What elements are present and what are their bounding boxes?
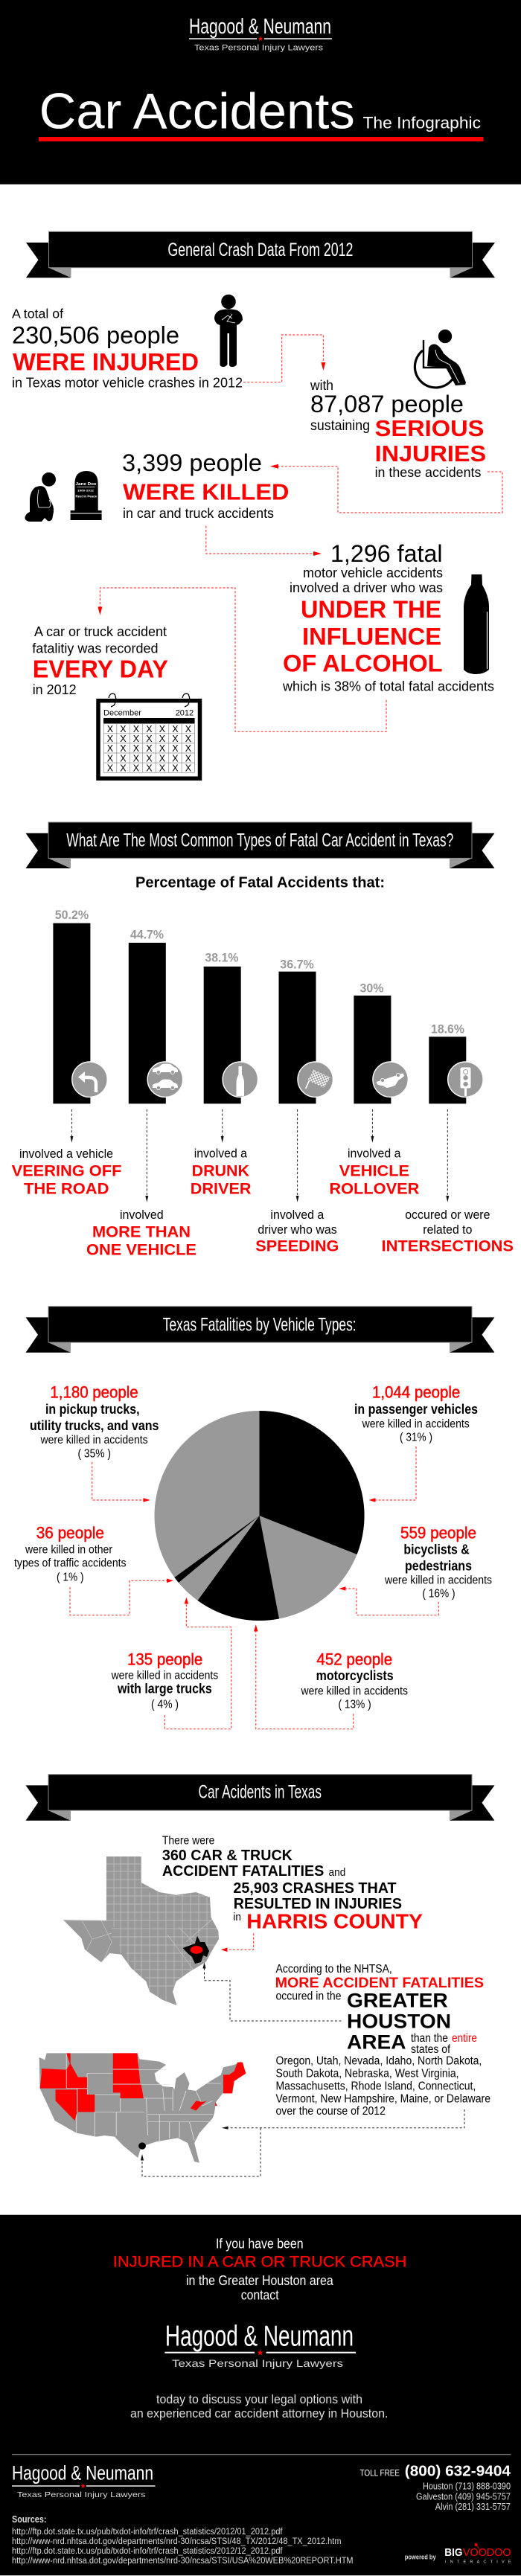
text block: Harris County: 360 CAR & TRUCK [162, 1848, 293, 1864]
arrow: injured to serious injuries [243, 335, 325, 382]
text block: Greater Houston area: GREATER [347, 1990, 448, 2012]
logo: small: Texas Personal Injury Lawyers [17, 2490, 146, 2499]
text block: every day: A car or truck accident [34, 624, 167, 639]
label: more than one vehicle: involved [120, 1208, 164, 1222]
arrow: passenger vehicles to pie [369, 1446, 416, 1502]
label: large trucks: with large trucks [117, 1682, 212, 1696]
label: large trucks: ( 4% ) [151, 1698, 179, 1711]
Houston marker [138, 2142, 146, 2150]
label: pickup trucks: utility trucks, and vans [30, 1418, 159, 1433]
phone numbers: (800) 632-9404 [405, 2463, 511, 2479]
section banner: Texas fatalities by vehicle types [25, 1307, 494, 1353]
sources [12, 2514, 354, 2566]
bar: veering off the road: 50.2% [55, 909, 89, 922]
label: vehicle rollover: VEHICLE [339, 1162, 409, 1180]
label: other traffic accidents: ( 1% ) [57, 1571, 83, 1583]
icon: calendar: XXXXXXX [107, 743, 192, 754]
call to action [113, 2237, 406, 2302]
arrow: Harris County to map [221, 1933, 254, 1952]
text block: under the influence of alcohol: UNDER THE [301, 596, 441, 623]
label: bicyclists and pedestrians: pedestrians [405, 1558, 472, 1573]
label: intersections: INTERSECTIONS [381, 1237, 514, 1255]
text block: 230,506 people were injured: 230,506 people [12, 322, 179, 349]
icon: calendar: 2012 [176, 708, 194, 717]
section banner: Car Acidents in Texas: Car Acidents in Texas [198, 1782, 322, 1803]
label: more than one vehicle [86, 1208, 196, 1259]
title underline [39, 137, 484, 141]
section banner: General Crash Data From 2012 [26, 231, 495, 278]
text block: Greater Houston area: Vermont, New Hampshire, Maine, or Delaware [275, 2092, 490, 2105]
text block: 87,087 serious injuries [310, 378, 486, 480]
label: pickup trucks [30, 1383, 159, 1460]
map: Texas counties [63, 1856, 219, 2005]
icon: bottle [223, 1062, 258, 1097]
sources: http://ftp.dot.state.tx.us/pub/txdot-info/trf/crash_statistics/2012/12_2012.pdf [12, 2547, 283, 2556]
logo: Hagood & Neumann [189, 15, 332, 52]
label: veering off the road: involved a vehicle [19, 1147, 113, 1161]
text block: 87,087 serious injuries: INJURIES [375, 440, 486, 467]
label: other traffic accidents: types of traffic accidents [14, 1557, 127, 1569]
text block: 87,087 serious injuries: in these accidents [375, 465, 481, 480]
label: veering off the road [12, 1147, 121, 1198]
label: large trucks [111, 1650, 219, 1711]
label: motorcyclists [301, 1650, 408, 1711]
arrows: bar chart to labels [70, 1109, 449, 1202]
call to action: If you have been [216, 2237, 304, 2252]
bar: more than one vehicle [129, 928, 166, 1103]
label: pickup trucks: in pickup trucks, [45, 1402, 140, 1417]
map: United States [39, 2053, 246, 2163]
label: speeding [255, 1208, 339, 1255]
label: bicyclists and pedestrians [384, 1524, 492, 1601]
text block: Harris County: HARRIS COUNTY [246, 1909, 423, 1932]
icon: calendar: XXXXXXX [107, 734, 192, 744]
text block: 3,399 people were killed [122, 449, 289, 521]
credit: Big Voodoo Interactive: VOODOO [463, 2546, 511, 2559]
label: passenger vehicles: ( 31% ) [400, 1432, 432, 1444]
label: intersections: related to [423, 1223, 472, 1237]
label: veering off the road: VEERING OFF [12, 1162, 121, 1180]
label: motorcyclists: 452 people [316, 1650, 392, 1669]
phone numbers [360, 2463, 511, 2512]
label: passenger vehicles: in passenger vehicles [354, 1402, 478, 1417]
logo: small: Hagood & Neumann [12, 2461, 153, 2484]
section banner: Texas fatalities by vehicle types: Texas Fatalities by Vehicle Types: [163, 1314, 357, 1335]
text block: 230,506 people were injured: A total of [12, 306, 63, 321]
call to action: INJURED IN A CAR OR TRUCK CRASH [113, 2254, 406, 2271]
label: large trucks: were killed in accidents [111, 1670, 219, 1682]
bar: more than one vehicle: 44.7% [130, 928, 164, 941]
bar chart: fatal accident types [53, 909, 483, 1103]
icon: checkered flag [298, 1062, 333, 1097]
credit: Big Voodoo Interactive: INTERACTIVE [445, 2560, 511, 2564]
text block: under the influence of alcohol: INFLUENCE [302, 624, 441, 650]
red states [40, 2053, 246, 2121]
text block: under the influence of alcohol: which is 38% of total fatal accidents [282, 679, 494, 694]
label: veering off the road: THE ROAD [24, 1180, 109, 1198]
bar: intersections [429, 1022, 466, 1103]
text block: Greater Houston area: South Dakota, Nebraska, West Virginia, [275, 2067, 458, 2080]
text block: Greater Houston area: states of [411, 2043, 451, 2056]
bar: drunk driver [204, 952, 241, 1103]
icon: calendar [98, 693, 199, 778]
bar: vehicle rollover [354, 981, 391, 1103]
arrow: pickup trucks to pie [92, 1462, 150, 1502]
text block: Harris County: and [329, 1866, 345, 1879]
label: bicyclists and pedestrians: 559 people [400, 1524, 476, 1542]
text block: 87,087 serious injuries: with [310, 378, 333, 393]
section banner: Car Acidents in Texas [25, 1775, 494, 1821]
bar: veering off the road [53, 909, 90, 1103]
text block: every day: in 2012 [33, 682, 77, 697]
label: drunk driver: DRUNK [192, 1162, 249, 1180]
text block: Harris County [162, 1834, 423, 1932]
credit: Big Voodoo Interactive [405, 2543, 511, 2564]
arrow: killed to alcohol [206, 526, 322, 556]
sources: http://ftp.dot.state.tx.us/pub/txdot-info/trf/crash_statistics/2012/01_2012.pdf [12, 2528, 283, 2537]
text block: Harris County: There were [162, 1834, 214, 1847]
text block: Harris County: 25,903 CRASHES THAT [233, 1880, 397, 1897]
text block: Greater Houston area: According to the NHTSA, [275, 1963, 392, 1976]
label: motorcyclists: were killed in accidents [301, 1685, 408, 1697]
icon: kneeling person [25, 472, 56, 522]
Harris County [191, 1946, 202, 1954]
text block: every day: fatalitiy was recorded [32, 641, 159, 656]
label: passenger vehicles: were killed in accidents [362, 1417, 470, 1430]
label: other traffic accidents: 36 people [36, 1524, 104, 1542]
bar: speeding [278, 958, 316, 1103]
panel: footer [0, 2215, 521, 2576]
label: bicyclists and pedestrians: were killed in accidents [384, 1574, 492, 1586]
arrow: other accidents to pie [70, 1579, 173, 1615]
text block: Greater Houston area: entire [452, 2032, 477, 2045]
text block: under the influence of alcohol [282, 540, 494, 694]
closing text: today to discuss your legal options with [156, 2392, 362, 2406]
bar: drunk driver: 38.1% [205, 952, 239, 965]
text block: Greater Houston area: AREA [347, 2031, 406, 2054]
chart heading: Percentage of Fatal Accidents that: [135, 875, 385, 891]
arrow: Greater Houston to Texas map [202, 1962, 341, 2021]
sources: http://www-nrd.nhtsa.dot.gov/departments/nrd-30/ncsa/STSI/USA%20WEB%20REPORT.HTM [12, 2557, 354, 2566]
text block: 87,087 serious injuries: sustaining [310, 418, 370, 434]
text block: Greater Houston area: MORE ACCIDENT FATALITIES [275, 1976, 484, 1991]
sources: http://www-nrd.nhtsa.dot.gov/departments/nrd-30/ncsa/STSI/48_TX/2012/48_TX_2012.htm [12, 2537, 341, 2546]
text block: Greater Houston area: Oregon, Utah, Nevada, Idaho, North Dakota, [275, 2054, 482, 2067]
arrow: alcohol to every day [98, 588, 386, 731]
label: other traffic accidents: were killed in other [25, 1543, 112, 1556]
credit: Big Voodoo Interactive: BIG [444, 2546, 462, 2559]
label: bicyclists and pedestrians: ( 16% ) [422, 1588, 456, 1601]
text block: Harris County: in [233, 1911, 241, 1923]
label: vehicle rollover: involved a [348, 1146, 401, 1160]
logo: Hagood & Neumann: Hagood & Neumann [189, 15, 331, 39]
logo: small [12, 2461, 155, 2499]
icon: calendar: December [103, 708, 141, 717]
text block: 87,087 serious injuries: 87,087 people [310, 391, 464, 417]
icon: tombstone: Rest in Peace [76, 494, 97, 499]
logo: Hagood & Neumann: Texas Personal Injury Lawyers [194, 43, 324, 52]
text block: 3,399 people were killed: WERE KILLED [123, 479, 289, 505]
logo: large: Hagood & Neumann [165, 2321, 354, 2353]
arrow: serious injuries to killed [270, 464, 502, 513]
icon: tombstone: Jane Doe [76, 482, 97, 487]
text block: Greater Houston area: occured in the [275, 1990, 341, 2002]
closing text [130, 2392, 388, 2420]
label: speeding: involved a [270, 1208, 325, 1222]
text block: Greater Houston area: Massachusetts, Rhode Island, Connecticut, [275, 2080, 476, 2092]
label: pickup trucks: ( 35% ) [77, 1447, 111, 1460]
label: other traffic accidents [14, 1524, 127, 1583]
Greater Houston counties [183, 1936, 209, 1964]
section banner: General Crash Data From 2012: General Crash Data From 2012 [167, 240, 353, 260]
label: speeding: SPEEDING [255, 1237, 339, 1255]
label: pickup trucks: 1,180 people [50, 1383, 138, 1402]
label: motorcyclists: motorcyclists [316, 1668, 394, 1683]
text block: under the influence of alcohol: 1,296 fatal [330, 540, 443, 567]
text block: every day [32, 624, 168, 697]
label: large trucks: 135 people [127, 1650, 202, 1669]
text block: Harris County: ACCIDENT FATALITIES [162, 1863, 324, 1880]
text block: 230,506 people were injured: WERE INJURED [13, 348, 199, 375]
text block: Greater Houston area: HOUSTON [347, 2011, 451, 2033]
label: vehicle rollover [329, 1146, 420, 1198]
icon: traffic light [448, 1062, 483, 1097]
label: bicyclists and pedestrians: bicyclists & [403, 1542, 470, 1557]
label: drunk driver [191, 1146, 252, 1198]
text block: Greater Houston area: than the [411, 2032, 448, 2045]
label: pickup trucks: were killed in accidents [40, 1434, 148, 1446]
label: more than one vehicle: ONE VEHICLE [86, 1241, 196, 1259]
icon: two cars [147, 1062, 183, 1097]
label: passenger vehicles [354, 1383, 478, 1444]
text block: under the influence of alcohol: involved a driver who was [290, 580, 443, 595]
call to action: contact [241, 2287, 279, 2302]
text block: under the influence of alcohol: OF ALCOHOL [283, 650, 443, 677]
sources: Sources: [12, 2514, 46, 2525]
icon: overturned car [373, 1062, 408, 1097]
arrow: large trucks to pie [164, 1598, 231, 1729]
text block: 87,087 serious injuries: SERIOUS [375, 415, 484, 441]
text block: 3,399 people were killed: in car and truck accidents [123, 506, 274, 521]
bar: intersections: 18.6% [431, 1022, 464, 1036]
call to action: in the Greater Houston area [186, 2273, 334, 2288]
arrow: bicyclists to pie [339, 1586, 438, 1615]
label: passenger vehicles: 1,044 people [372, 1383, 460, 1402]
icon: tombstone: 1900-2012 [77, 490, 94, 493]
label: more than one vehicle: MORE THAN [92, 1223, 191, 1241]
text block: every day: EVERY DAY [33, 656, 168, 683]
bar: vehicle rollover: 30% [360, 981, 384, 995]
panel: header [0, 0, 521, 185]
icon: tombstone [71, 471, 102, 520]
icon: calendar: XXXXXXX [107, 763, 192, 773]
credit: Big Voodoo Interactive: powered by [405, 2553, 436, 2560]
bar: speeding: 36.7% [280, 958, 314, 972]
label: speeding: driver who was [258, 1223, 337, 1237]
icon: turn arrow [72, 1062, 107, 1097]
closing text: an experienced car accident attorney in Houston. [130, 2406, 388, 2420]
arrow: states list to US map [141, 2109, 464, 2176]
label: vehicle rollover: ROLLOVER [329, 1180, 420, 1198]
logo: large: Texas Personal Injury Lawyers [172, 2357, 343, 2369]
text block: 230,506 people were injured: in Texas motor vehicle crashes in 2012 [12, 376, 243, 391]
label: intersections: occured or were [405, 1208, 490, 1222]
text block: Greater Houston area [275, 1963, 490, 2118]
pie chart: fatalities by vehicle type [155, 1411, 365, 1621]
icon: beer bottle [464, 574, 489, 674]
icon: calendar: XXXXXXX [107, 724, 192, 734]
logo: large [164, 2321, 356, 2369]
section banner: most common types [25, 822, 494, 868]
icon: calendar: XXXXXXX [107, 753, 192, 763]
text block: under the influence of alcohol: motor vehicle accidents [303, 565, 443, 580]
text block: Harris County: RESULTED IN INJURIES [234, 1896, 402, 1912]
text block: 3,399 people were killed: 3,399 people [122, 449, 262, 476]
text block: 230,506 people were injured [12, 306, 243, 391]
subtitle: The Infographic [363, 114, 481, 132]
label: drunk driver: DRIVER [191, 1180, 252, 1198]
title: Car Accidents [39, 83, 355, 140]
label: motorcyclists: ( 13% ) [338, 1698, 371, 1711]
arrow: motorcyclists to pie [254, 1624, 354, 1729]
label: intersections [381, 1208, 514, 1255]
text block: Greater Houston area: over the course of 2012 [275, 2105, 386, 2118]
phone numbers: TOLL FREE [360, 2467, 400, 2478]
icon: standing injured person [214, 295, 243, 367]
label: drunk driver: involved a [194, 1146, 247, 1160]
icon: wheelchair [415, 330, 466, 388]
